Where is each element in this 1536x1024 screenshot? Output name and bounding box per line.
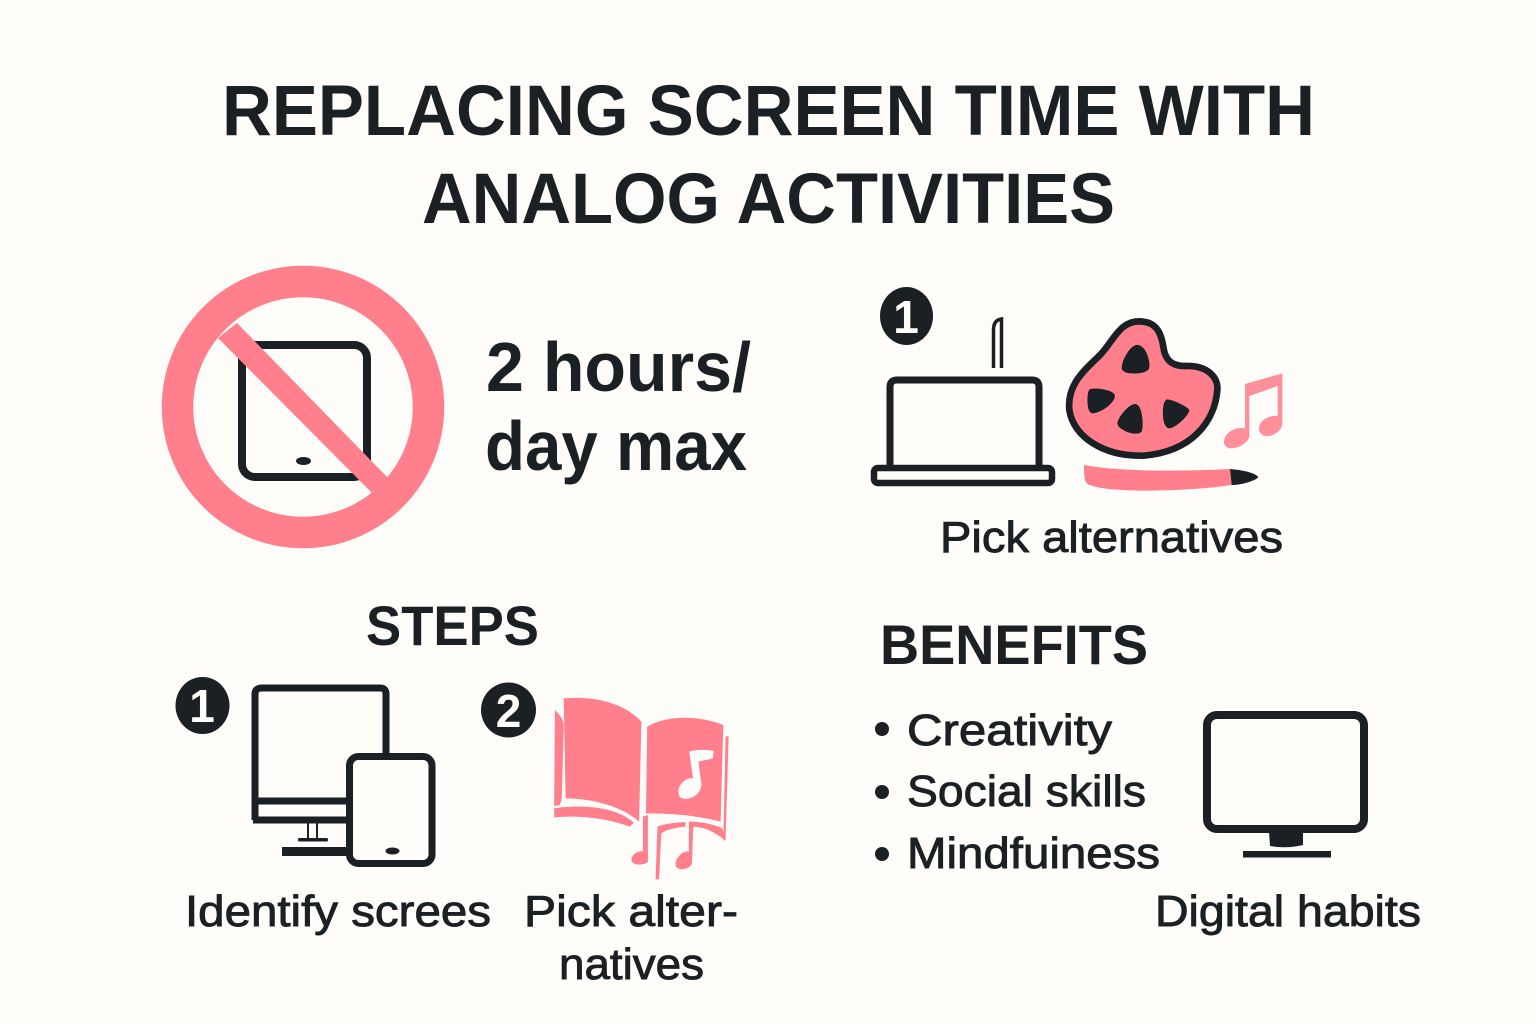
badge: step 1 — [176, 677, 230, 734]
icon: desktop monitor — [1207, 715, 1364, 858]
badge: step 1: 1 — [189, 680, 215, 732]
title: ANALOG ACTIVITIES — [422, 160, 1115, 239]
badge: step 2 — [481, 682, 536, 738]
title: REPLACING SCREEN TIME WITH — [222, 72, 1315, 151]
text: 2 hours per day max: day max — [485, 407, 747, 485]
icon: paint palette — [1069, 321, 1217, 456]
caption: pick alternatives, two lines — [524, 887, 738, 989]
icon: laptop — [874, 319, 1052, 483]
list: benefits — [875, 706, 1160, 878]
caption: identify screens: Identify screes — [185, 887, 491, 936]
title — [222, 72, 1315, 239]
caption: pick alternatives, two lines: Pick alter- — [524, 887, 738, 936]
caption: pick alternatives, two lines: natives — [559, 940, 704, 989]
icon: music notes — [1224, 373, 1282, 448]
badge: number 1: 1 — [893, 291, 919, 343]
panel: pick alternatives — [874, 287, 1283, 562]
list: benefits: Social skills — [907, 767, 1146, 816]
heading: steps: STEPS — [366, 594, 539, 657]
icon: book with music notes — [554, 698, 729, 879]
icon: pencil — [1084, 465, 1258, 491]
icon: monitor and tablet — [253, 688, 432, 864]
text: 2 hours per day max: 2 hours/ — [486, 328, 751, 406]
badge: number 1 — [880, 287, 933, 345]
panel: steps — [176, 594, 738, 989]
text: 2 hours per day max — [485, 328, 751, 485]
caption: digital habits: Digital habits — [1155, 887, 1421, 936]
panel: benefits — [875, 613, 1421, 936]
panel: screen limit — [178, 282, 751, 532]
badge: step 2: 2 — [496, 685, 521, 737]
caption: pick alternatives: Pick alternatives — [940, 513, 1283, 562]
list: benefits: Mindfuiness — [907, 829, 1160, 878]
icon: tablet with prohibition sign — [178, 282, 428, 532]
heading: benefits: BENEFITS — [880, 613, 1148, 676]
list: benefits: Creativity — [907, 706, 1112, 755]
